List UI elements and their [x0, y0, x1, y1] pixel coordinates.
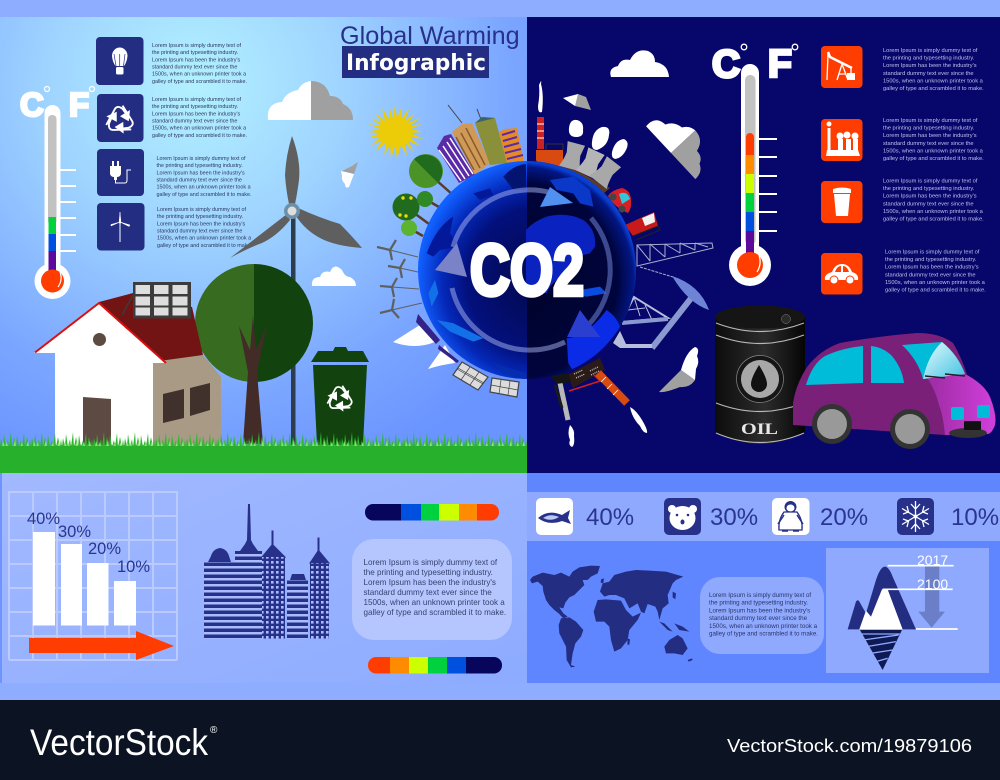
- colour scale: hot to cool: [368, 657, 502, 674]
- text block: oil pump: Lorem Ipsum is simply dummy text of: [883, 48, 978, 54]
- text panel: Lorem Ipsum has been the industry's: [709, 607, 810, 614]
- text block: light bulb: standard dummy text ever since the: [152, 64, 237, 70]
- thermometer: high temperature: [712, 43, 798, 286]
- cloud: half white half grey: [268, 81, 353, 120]
- text block: recycling: the printing and typesetting industry.: [152, 104, 238, 110]
- text panel: the printing and typesetting industry.: [709, 600, 808, 607]
- panel: polluted scene: [527, 17, 1000, 473]
- text block: oil pump: the printing and typesetting industry.: [883, 56, 975, 62]
- text block: factory: 1500s, when an unknown printer took a: [883, 148, 984, 154]
- bar chart: 40%: [27, 510, 60, 528]
- text panel: the printing and typesetting industry.: [364, 568, 493, 577]
- text panel: [700, 577, 824, 654]
- icon: fish: [536, 498, 573, 535]
- text block: light bulb: Lorem Ipsum has been the industry's: [152, 57, 241, 63]
- animal statistics strip: [527, 492, 1000, 541]
- title: Infographic: [346, 51, 486, 76]
- text block: light bulb: Lorem Ipsum is simply dummy text of: [152, 43, 241, 49]
- title: [340, 22, 520, 78]
- icon: trash cup: [821, 181, 862, 223]
- text block: trash: standard dummy text ever since the: [883, 201, 974, 207]
- text block: recycling: galley of type and scrambled it to make.: [152, 133, 247, 139]
- cloud: top white: [610, 50, 669, 77]
- cycle ring: [435, 187, 610, 350]
- text block: factory: standard dummy text ever since the: [883, 141, 974, 147]
- text panel: galley of type and scrambled it to make.: [364, 608, 506, 617]
- iceberg diagram: 2100: [917, 576, 948, 592]
- cloud: small tilted: [341, 162, 358, 188]
- stat: bear 30%: 30%: [710, 504, 758, 531]
- iceberg diagram: 2017: [917, 552, 948, 568]
- icon: bear: [664, 498, 701, 535]
- small red car: [608, 188, 631, 213]
- text block: wind turbine: Lorem Ipsum has been the industry's: [157, 221, 246, 227]
- car: purple: [793, 333, 995, 449]
- panel: clean energy scene: [0, 17, 527, 473]
- text block: factory: Lorem Ipsum is simply dummy text of: [883, 118, 978, 124]
- icon: light bulb: [96, 37, 144, 85]
- small wind turbines: [377, 240, 422, 318]
- stat: penguin 20%: 20%: [820, 504, 868, 531]
- text panel: standard dummy text ever since the: [709, 615, 808, 622]
- text block: trash: 1500s, when an unknown printer took a: [883, 209, 984, 215]
- bar chart: 20%: [88, 540, 121, 558]
- text block: recycling: Lorem Ipsum has been the industry's: [152, 111, 241, 117]
- text block: plug: standard dummy text ever since the: [156, 177, 242, 183]
- thermometer: high temperature: F: [768, 43, 792, 86]
- trees on globe: [392, 154, 453, 236]
- icon: oil pump: [821, 46, 862, 88]
- wind turbine: large: [230, 136, 362, 445]
- house: [34, 282, 221, 445]
- recycling bin: [311, 347, 369, 445]
- thermometer: high temperature: C: [712, 43, 740, 86]
- text block: trash: the printing and typesetting industry.: [883, 186, 975, 192]
- text panel: galley of type and scrambled it to make.: [709, 630, 818, 638]
- CO2 label: CO2: [470, 230, 584, 311]
- cloud: small white: [312, 266, 356, 286]
- thermometer: low temperature: F: [69, 86, 89, 123]
- text panel: 1500s, when an unknown printer took a: [709, 623, 818, 630]
- text block: wind turbine: standard dummy text ever since the: [157, 228, 242, 234]
- text block: light bulb: the printing and typesetting industry.: [152, 50, 238, 56]
- text block: oil pump: galley of type and scrambled it to make.: [883, 86, 984, 92]
- text panel: Lorem Ipsum has been the industry's: [364, 578, 496, 587]
- grass: [0, 431, 527, 473]
- text block: plug: Lorem Ipsum has been the industry's: [156, 170, 245, 176]
- stat: fish 40%: 40%: [586, 504, 634, 531]
- text block: wind turbine: 1500s, when an unknown printer took a: [157, 236, 251, 242]
- cluster: green objects around globe: [377, 105, 524, 397]
- text block: wind turbine: the printing and typesetting industry.: [157, 214, 243, 220]
- white splashes: [568, 407, 647, 447]
- icon: wind turbine: [97, 203, 144, 250]
- text block: plug: the printing and typesetting industry.: [156, 163, 243, 169]
- icon: factory: [821, 119, 862, 161]
- text block: car: 1500s, when an unknown printer took a: [885, 280, 986, 286]
- footer bar: ®: [210, 725, 218, 736]
- sailboats: [393, 314, 459, 369]
- text block: oil pump: standard dummy text ever since the: [883, 71, 974, 77]
- icon: car: [821, 253, 862, 294]
- arrow: rising trend: [29, 631, 174, 660]
- thermometer: low temperature: [20, 86, 94, 299]
- icon: snowflake: [897, 498, 934, 535]
- house: roof: [99, 293, 203, 363]
- icon: recycling: [97, 94, 144, 142]
- panel: bottom left statistics: [0, 473, 527, 683]
- cloud: large tilted: [646, 104, 720, 179]
- cluster: polluting objects around globe: [536, 81, 713, 447]
- globe with CO2: [418, 161, 636, 380]
- text block: plug: galley of type and scrambled it to make.: [156, 192, 251, 198]
- stat: snowflake 10%: 10%: [951, 504, 999, 531]
- pump jack: [613, 267, 709, 348]
- cloud: lower right: [659, 347, 698, 392]
- oil derrick: [637, 243, 713, 266]
- text block: trash: Lorem Ipsum has been the industry's: [883, 194, 977, 200]
- arrow: ice decline: [918, 566, 945, 628]
- bar chart: 10%: [117, 558, 150, 576]
- text block: car: the printing and typesetting industry.: [885, 257, 977, 263]
- bar chart: 30%: [58, 523, 91, 541]
- text block: recycling: standard dummy text ever since the: [152, 118, 237, 124]
- house: front wall: [34, 303, 166, 445]
- text block: wind turbine: Lorem Ipsum is simply dummy text of: [157, 207, 246, 213]
- city skyline: [204, 504, 329, 638]
- continents: [427, 164, 620, 380]
- text panel: 1500s, when an unknown printer took a: [364, 598, 505, 607]
- text block: car: standard dummy text ever since the: [885, 272, 976, 278]
- text block: light bulb: 1500s, when an unknown printer took a: [152, 72, 246, 78]
- text block: plug: 1500s, when an unknown printer took a: [156, 185, 251, 191]
- iceberg diagram: [826, 548, 989, 673]
- text block: factory: galley of type and scrambled it to make.: [883, 156, 984, 162]
- footer bar: [0, 700, 1000, 780]
- text panel: [352, 539, 512, 640]
- text panel: standard dummy text ever since the: [364, 588, 492, 597]
- icon: penguin: [772, 498, 810, 535]
- bar chart: [9, 491, 177, 660]
- small cloud: [563, 94, 591, 110]
- red truck: [625, 212, 660, 240]
- text block: car: Lorem Ipsum has been the industry's: [885, 265, 979, 271]
- text panel: Lorem Ipsum is simply dummy text of: [364, 558, 498, 567]
- thermometer: low temperature: C: [20, 86, 44, 123]
- text block: factory: the printing and typesetting industry.: [883, 126, 975, 132]
- panel: bottom right statistics: [527, 473, 1000, 683]
- icon: plug: [97, 149, 144, 196]
- tree: large: [195, 264, 313, 444]
- text block: trash: galley of type and scrambled it to make.: [883, 216, 984, 222]
- footer bar: VectorStock.com/19879106: [727, 736, 972, 756]
- solar panels on globe: [453, 362, 519, 397]
- industrial machinery: [551, 358, 627, 420]
- footer bar: VectorStock: [30, 722, 208, 763]
- text block: car: Lorem Ipsum is simply dummy text of: [885, 250, 980, 256]
- smoke puffs: [538, 81, 628, 159]
- cooling towers: [559, 141, 623, 194]
- text block: oil pump: Lorem Ipsum has been the industry's: [883, 63, 977, 69]
- text block: wind turbine: galley of type and scrambled it to make.: [157, 243, 252, 249]
- colour scale: cool to hot: [365, 504, 499, 521]
- house: side wall: [152, 355, 221, 445]
- text block: plug: Lorem Ipsum is simply dummy text of: [156, 156, 246, 162]
- text block: light bulb: galley of type and scrambled it to make.: [152, 79, 247, 85]
- text block: recycling: 1500s, when an unknown printer took a: [152, 126, 246, 132]
- city on globe: [437, 105, 524, 183]
- oil barrel: OIL: [741, 421, 778, 438]
- factory and stack: [536, 117, 563, 168]
- title: Global Warming: [340, 22, 520, 50]
- text block: oil pump: 1500s, when an unknown printer took a: [883, 78, 984, 84]
- text panel: Lorem Ipsum is simply dummy text of: [709, 592, 811, 599]
- text block: car: galley of type and scrambled it to make.: [885, 288, 986, 294]
- solar panel on roof: [122, 282, 191, 318]
- text block: trash: Lorem Ipsum is simply dummy text of: [883, 178, 978, 184]
- oil barrel: [715, 306, 805, 444]
- icon: sun: [367, 105, 423, 159]
- text block: recycling: Lorem Ipsum is simply dummy text of: [152, 97, 241, 103]
- world map: [530, 566, 693, 667]
- text block: factory: Lorem Ipsum has been the industry's: [883, 133, 977, 139]
